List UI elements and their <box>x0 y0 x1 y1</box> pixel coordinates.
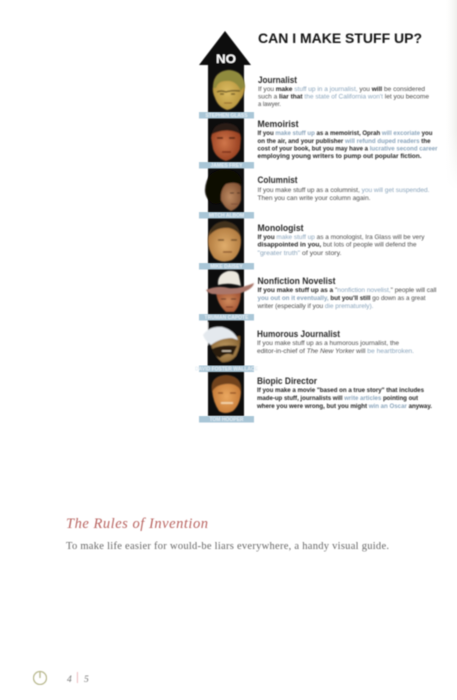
entry: Columnist: Columnist <box>258 175 298 186</box>
entry: Monologist <box>258 223 425 257</box>
entry: Nonfiction Novelist: Nonfiction Novelist <box>258 276 336 287</box>
entry: Monologist: If you make stuff up as a monologist, Ira Glass will be very <box>258 234 425 241</box>
entry: Humorous Journalist: editor-in-chief of The New Yorker will be heartbroken. <box>257 348 414 355</box>
portrait: Mike Daisey <box>208 221 241 262</box>
name label: Mitch Albom <box>199 212 254 219</box>
entry: Nonfiction Novelist: If you make stuff up as a "nonfiction novelist, " people will call <box>258 287 436 294</box>
name label: Truman Capote <box>199 314 254 321</box>
name label: Mike Daisey <box>199 263 254 270</box>
portrait: Tom Hooper <box>212 375 241 413</box>
arrow label: NO: NO <box>216 54 236 66</box>
icon: power symbol <box>34 671 46 684</box>
entry: Journalist <box>258 75 430 108</box>
name label: Mitch Albom: MITCH ALBOM <box>209 213 244 219</box>
arrow: NO <box>199 31 251 416</box>
portrait: Mitch Albom <box>205 169 242 211</box>
entry: Memoirist: If you make stuff up as a memoirist, Oprah will excoriate you <box>258 130 433 137</box>
heading: The Rules of Invention: The Rules of Invention <box>66 516 208 532</box>
entry: Journalist: a lawyer. <box>258 101 281 108</box>
entry: Columnist: Then you can write your column again. <box>258 195 371 202</box>
entry: Journalist: If you make stuff up in a journalist, you will be considered <box>258 86 426 93</box>
entry: Memoirist <box>258 119 438 160</box>
name label: Tom Hooper: TOM HOOPER <box>209 417 244 423</box>
entry: Columnist: If you make stuff up as a columnist, you will get suspended. <box>258 187 430 194</box>
title: CAN I MAKE STUFF UP? <box>258 31 422 46</box>
entry: Biopic Director: Biopic Director <box>257 376 317 387</box>
entry: Monologist: "greater truth" of your story. <box>258 250 342 257</box>
entry: Biopic Director: If you make a movie "based on a true story" that includes <box>257 387 425 394</box>
name label: Truman Capote: TRUMAN CAPOTE <box>205 315 249 321</box>
entry: Nonfiction Novelist <box>256 276 436 310</box>
portrait: David Foster Wallace <box>203 320 244 366</box>
entry: Biopic Director: where you were wrong, but you might win an Oscar anyway. <box>256 403 432 410</box>
name label: David Foster Wallace: DAVID FOSTER WALLACE <box>195 367 259 373</box>
portrait: Truman Capote <box>206 271 254 312</box>
entry: Nonfiction Novelist: you out on it eventually, but you'll still go down as a great <box>258 295 426 302</box>
name label: James Frey <box>199 162 254 169</box>
page edge shadow <box>446 0 457 190</box>
entry: Biopic Director <box>256 376 432 410</box>
name label: Tom Hooper <box>199 416 254 423</box>
name label: Stephen Glass <box>199 112 254 119</box>
page numbers: 5 <box>84 675 89 685</box>
entry: Journalist: Journalist <box>258 75 298 86</box>
entry: Memoirist: on the air, and your publisher will refund duped readers the <box>258 138 431 145</box>
entry: Biopic Director: made-up stuff, journalists will write articles pointing out <box>257 395 418 402</box>
entry: Monologist: disappointed in you, but lots of people will defend the <box>258 242 417 248</box>
portrait: Stephen Glass <box>213 70 245 110</box>
entry: Journalist: such a liar that the state of California won't let you become <box>258 94 430 100</box>
entry: Memoirist: employing young writers to pump out popular fiction. <box>258 153 422 160</box>
portrait: James Frey <box>211 123 241 161</box>
name label: Stephen Glass: STEPHEN GLASS <box>205 113 248 119</box>
entry: Humorous Journalist <box>257 329 414 355</box>
entry: Humorous Journalist: Humorous Journalist <box>257 329 341 340</box>
subheading: To make life easier for would-be liars everywhere, a handy visual guide. <box>66 541 389 552</box>
entry: Columnist <box>258 175 430 202</box>
entry: Memoirist: cost of your book, but you may have a lucrative second career <box>258 146 438 152</box>
name label: Mike Daisey: MIKE DAISEY <box>210 264 243 270</box>
entry: Nonfiction Novelist: writer (especially if you die prematurely). <box>256 303 374 310</box>
page numbers <box>67 672 89 685</box>
entry: Memoirist: Memoirist <box>258 119 299 130</box>
page numbers: 4 <box>67 675 72 685</box>
entry: Humorous Journalist: If you make stuff up as a humorous journalist, the <box>257 340 400 347</box>
name label: James Frey: JAMES FREY <box>211 163 243 169</box>
entry: Monologist: Monologist <box>258 223 304 234</box>
